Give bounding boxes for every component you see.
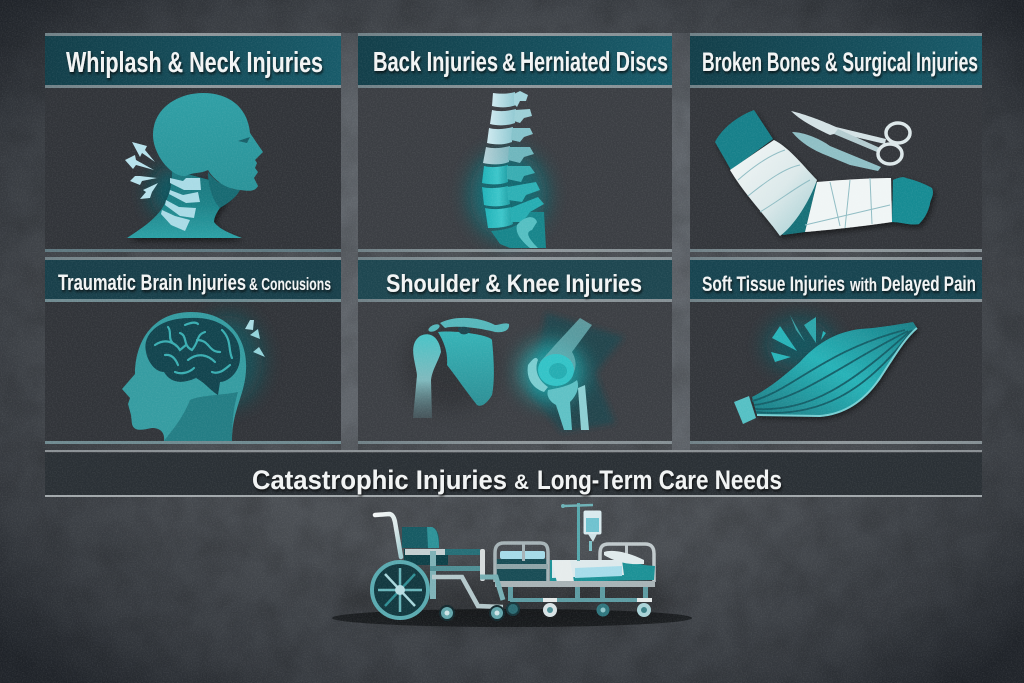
- panel: catastrophic injuries banner: [45, 450, 982, 497]
- icon: scissors: [791, 111, 910, 164]
- heading: with: [849, 275, 877, 295]
- icon: shoulder bones: [405, 318, 509, 418]
- heading: Herniated Discs: [520, 46, 668, 77]
- icon: iv drip: [561, 503, 601, 561]
- heading: Shoulder & Knee Injuries: [386, 270, 642, 298]
- icon: brain: [145, 318, 240, 395]
- icon: spine: [470, 91, 546, 248]
- icon: neck vertebrae: [161, 178, 201, 231]
- icon: hospital bed: [495, 503, 655, 617]
- panel: traumatic brain injuries: [45, 257, 341, 444]
- heading: & Concusions: [249, 274, 331, 294]
- panel: shoulder and knee injuries: [358, 257, 672, 444]
- icon: scalpel: [792, 132, 881, 171]
- panel: whiplash and neck injuries: [45, 33, 341, 252]
- icon: pain arrows: [125, 142, 158, 199]
- heading: [373, 46, 668, 77]
- icon: torn muscle: [734, 315, 917, 424]
- icon: wheelchair and hospital bed: [332, 503, 692, 628]
- icon: bandaged arm: [715, 110, 933, 236]
- heading: &: [502, 49, 516, 77]
- heading: Back Injuries: [373, 46, 498, 77]
- heading: Long-Term Care Needs: [537, 465, 782, 495]
- heading: Whiplash & Neck Injuries: [66, 47, 323, 79]
- heading: Traumatic Brain Injuries: [58, 270, 246, 295]
- icon: head and neck with spine: [125, 93, 263, 238]
- panel: broken bones and surgical injuries: [690, 33, 982, 252]
- icon: impact marks: [245, 320, 265, 357]
- heading: &: [514, 471, 529, 494]
- panel: soft tissue injuries: [690, 257, 982, 444]
- panel: back injuries and herniated discs: [358, 33, 672, 252]
- heading: [252, 465, 782, 495]
- heading: Delayed Pain: [881, 272, 976, 296]
- heading: Catastrophic Injuries: [252, 465, 507, 495]
- icon: wheelchair: [372, 514, 504, 620]
- icon: knee joint: [520, 313, 624, 432]
- icon: head with brain: [122, 312, 265, 441]
- heading: Soft Tissue Injuries: [702, 272, 845, 296]
